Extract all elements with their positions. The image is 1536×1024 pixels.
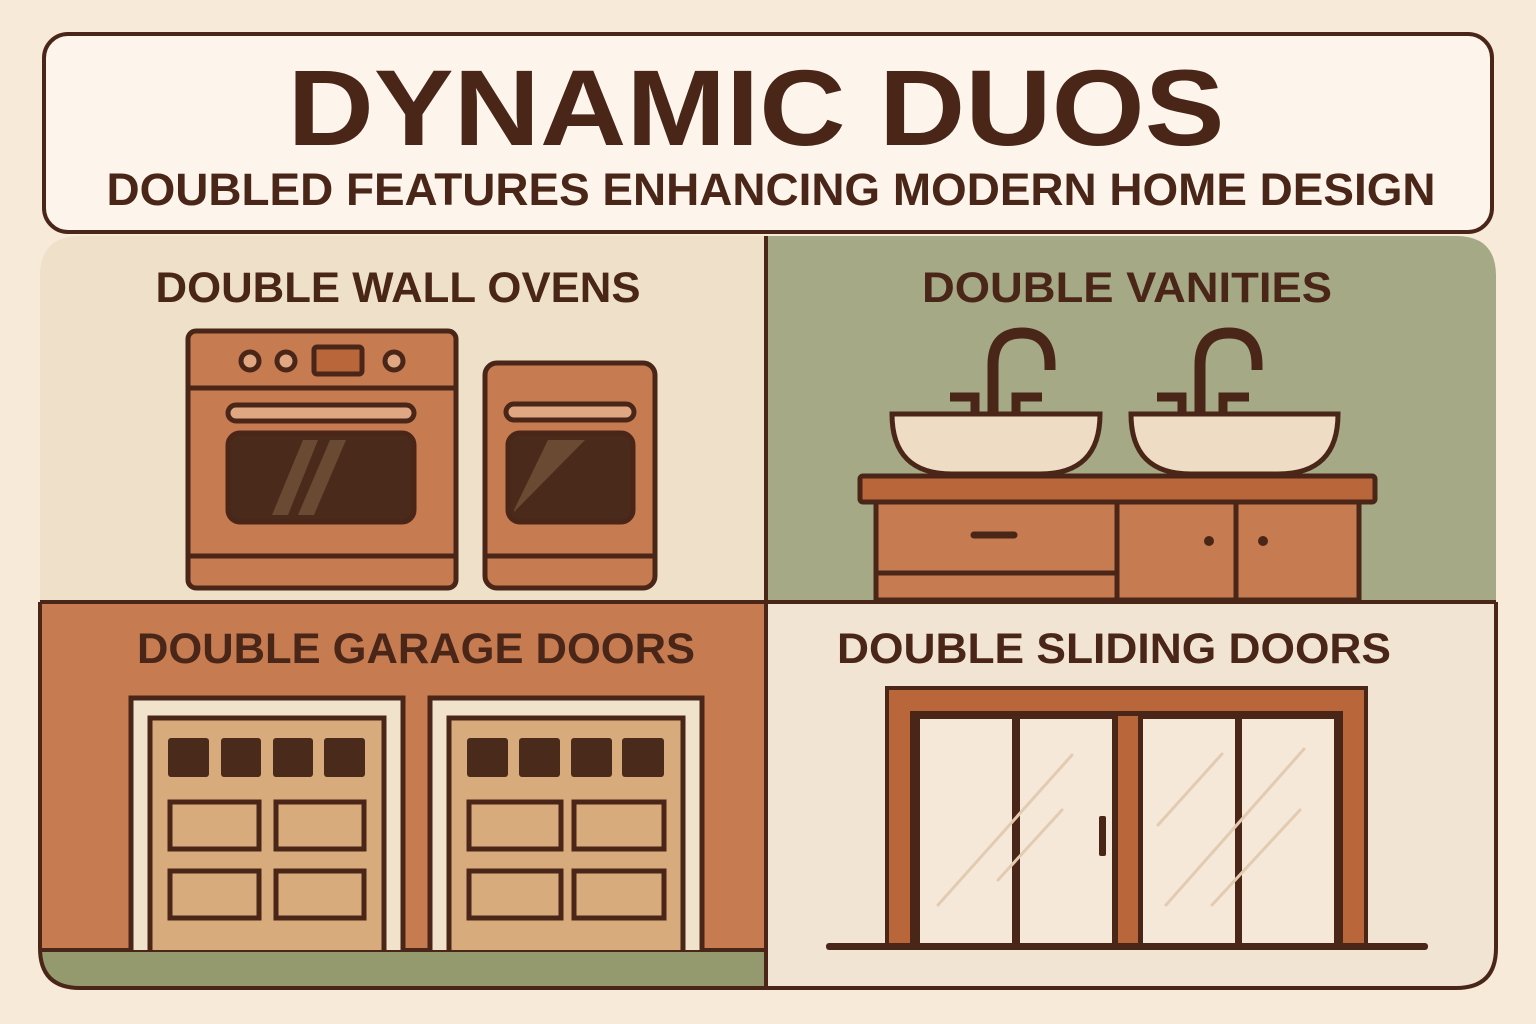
title: DYNAMIC DUOS <box>288 47 1224 168</box>
icon: small oven <box>485 363 655 588</box>
subtitle: DOUBLED FEATURES ENHANCING MODERN HOME DESIGN <box>106 164 1436 215</box>
panel: double wall ovens <box>40 236 766 602</box>
title box <box>44 34 1492 232</box>
icon: sinks <box>892 414 1338 474</box>
icon: faucets <box>950 333 1257 414</box>
icon: garage doors <box>131 698 702 950</box>
icon: vanity cabinet <box>860 476 1375 600</box>
heading: sliding: DOUBLE SLIDING DOORS <box>837 625 1391 673</box>
panel: double vanities <box>766 236 1496 602</box>
heading: ovens: DOUBLE WALL OVENS <box>156 264 640 312</box>
heading: garage: DOUBLE GARAGE DOORS <box>137 625 695 673</box>
heading: vanities: DOUBLE VANITIES <box>922 264 1332 312</box>
panel: double garage doors <box>40 602 766 988</box>
icon: sliding door <box>826 688 1428 950</box>
dividers and borders <box>40 236 1496 988</box>
panel: double sliding doors <box>766 602 1496 988</box>
icon: large oven <box>188 331 456 588</box>
